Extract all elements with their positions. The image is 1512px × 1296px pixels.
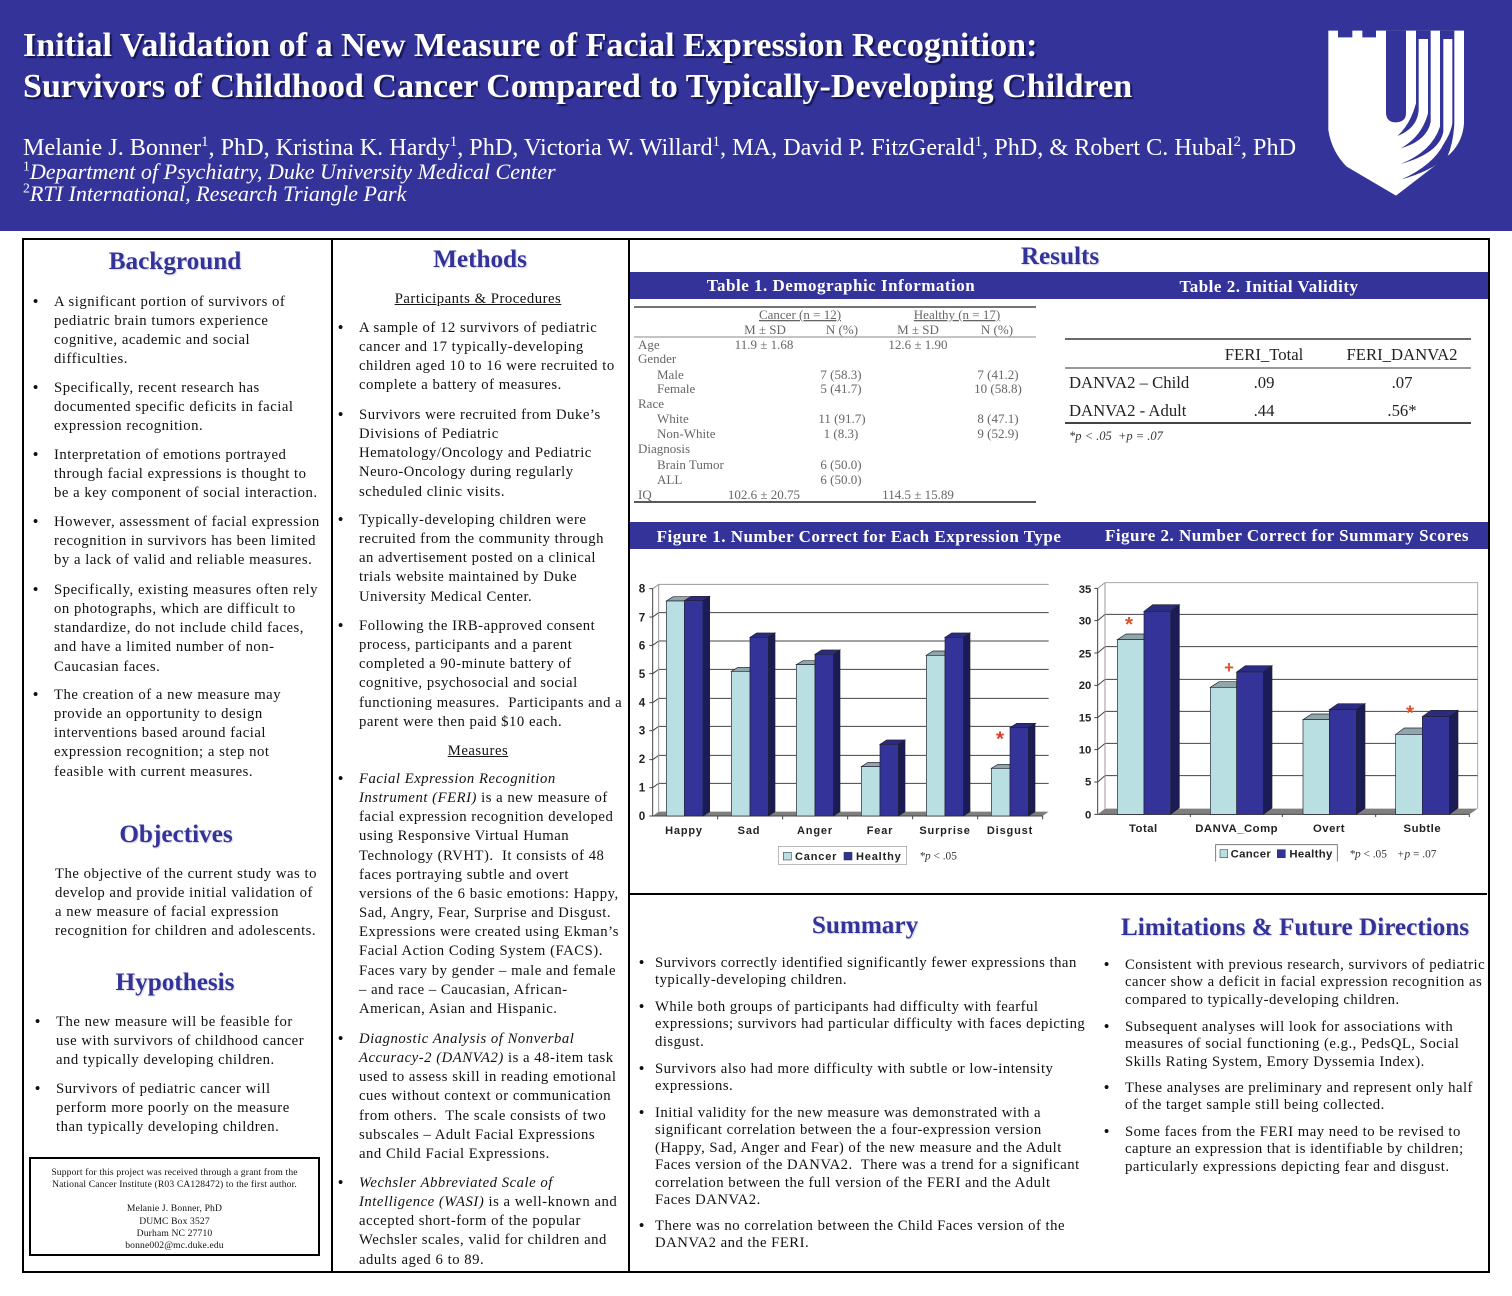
table 2: initial validity: *p < .05 +p = .07 [1069, 429, 1164, 443]
measure: DANVA2: from others. The scale consists of two [359, 1108, 606, 1124]
background bullet 6: The creation of a new measure may [54, 687, 281, 703]
text: • [338, 618, 344, 634]
limitations bullet 1: Consistent with previous research, survivors of pediatric [1125, 957, 1485, 973]
authors: Melanie J. Bonner1, PhD, Kristina K. Hardy1, PhD, Victoria W. Willard1, MA, David P. FitzGerald1, PhD, & Robert C. Hubal2, PhD [23, 134, 1296, 161]
x axis labels: Subtle [1404, 823, 1441, 835]
measure: FERI: Faces vary by gender – male and female [359, 963, 616, 979]
methods bullet 4 [338, 618, 622, 730]
hypothesis bullet 1 [35, 1014, 304, 1068]
table 1: demographics: Male [657, 367, 684, 382]
background bullet 2: documented specific deficits in facial [54, 399, 294, 415]
background bullet 3: Interpretation of emotions portrayed [54, 447, 286, 463]
methods bullet 4: functioning measures. Participants and a [359, 695, 622, 711]
x axis labels: Overt [1313, 823, 1345, 835]
hypothesis bullet 2: Survivors of pediatric cancer will [56, 1081, 271, 1097]
background bullet 4: by a lack of valid and reliable measures. [54, 552, 312, 568]
measure: FERI: facial expression recognition developed [359, 809, 613, 825]
background bullet 5: Specifically, existing measures often rely [54, 582, 318, 598]
measure: WASI: Wechsler Abbreviated Scale of [359, 1175, 553, 1191]
table 1: demographics [634, 306, 1036, 503]
summary bullet 4 [639, 1105, 1080, 1208]
measure: DANVA2: Diagnostic Analysis of Nonverbal [359, 1031, 574, 1047]
poster frame [22, 238, 1490, 1273]
subheading: participants and procedures: Participants & Procedures [395, 291, 561, 307]
limitations bullet 4 [1104, 1124, 1464, 1175]
hypothesis bullet 1: use with survivors of childhood cancer [56, 1033, 304, 1049]
summary bullet 3: expressions. [655, 1078, 733, 1094]
objectives text: The objective of the current study was to [55, 866, 317, 882]
table 2: initial validity: .44 [1254, 401, 1275, 420]
table 1: demographics: 114.5 ± 15.89 [882, 487, 954, 502]
text: • [35, 1081, 41, 1097]
figure header bar [630, 522, 1488, 549]
table 2: initial validity: DANVA2 - Adult [1069, 401, 1187, 420]
background bullet 1 [33, 294, 285, 367]
y axis labels: 7 [639, 611, 645, 624]
hypothesis bullet 1: and typically developing children. [56, 1052, 275, 1068]
table 1: demographics: M ± SD [897, 322, 939, 337]
x axis labels: Happy [665, 825, 703, 837]
table 1: demographics: 8 (47.1) [977, 411, 1019, 426]
bars: disgust [991, 723, 1036, 816]
table 1: demographics: 102.6 ± 20.75 [728, 487, 800, 502]
y axis labels: 5 [1085, 777, 1091, 789]
measure: FERI [338, 771, 619, 1017]
methods bullet 4: parent were then paid $10 each. [359, 714, 562, 730]
background bullet 5: and have a limited number of non- [54, 639, 275, 655]
x axis labels [665, 825, 1033, 837]
x axis labels: Anger [797, 825, 833, 837]
background bullet 6: feasible with current measures. [54, 764, 253, 780]
summary bullet 4: Initial validity for the new measure was demonstrated with a [655, 1105, 1041, 1121]
text: • [1104, 1124, 1110, 1140]
measure: WASI: Wechsler scales, valid for children and [359, 1232, 607, 1248]
background bullet 2 [33, 380, 294, 434]
methods bullet 3: trials website maintained by Duke [359, 569, 577, 585]
bar chart: figure 2 [1079, 582, 1478, 862]
y axis labels: 6 [639, 640, 646, 653]
significance markers [1125, 613, 1415, 724]
background bullet 3 [33, 447, 318, 501]
support and contact box: Durham NC 27710 [137, 1228, 212, 1239]
measure: DANVA2 [338, 1031, 617, 1162]
heading: limitations and future directions: Limitations & Future Directions [1121, 914, 1469, 941]
significance note: *p < .05 [919, 851, 957, 863]
table 1: demographics: 6 (50.0) [820, 457, 862, 472]
methods bullet 4: cognitive, psychosocial and social [359, 675, 578, 691]
summary bullet 5 [639, 1218, 1065, 1251]
summary bullet 2: expressions; survivors had particular difficulty with faces depicting [655, 1016, 1085, 1032]
bars: subtle [1396, 710, 1458, 814]
text: • [33, 294, 39, 310]
summary bullet 4: Faces version of the DANVA2. There was a trend for a significant [655, 1157, 1080, 1173]
table 1: demographics: 7 (41.2) [977, 367, 1019, 382]
legend [1216, 845, 1337, 862]
measure: FERI: Facial Expression Recognition [359, 771, 556, 787]
measure: DANVA2: and Child Facial Expressions. [359, 1146, 550, 1162]
summary bullet 3 [639, 1061, 1053, 1094]
limitations bullet 4: capture an expression that is identifiable by children; [1125, 1141, 1464, 1157]
measure: FERI: Instrument (FERI) is a new measure of [359, 790, 608, 806]
limitations bullet 4: Some faces from the FERI may need to be revised to [1125, 1124, 1461, 1140]
heading: methods: Methods [433, 246, 527, 273]
limitations bullet 2 [1104, 1019, 1459, 1070]
y axis labels: 5 [639, 668, 646, 681]
objectives text: a new measure of facial expression [55, 904, 279, 920]
limitations bullet 1: compared to typically-developing children. [1125, 992, 1400, 1008]
background bullet 6: provide an opportunity to design [54, 706, 263, 722]
summary bullet 1: typically-developing children. [655, 972, 847, 988]
methods bullet 2: Survivors were recruited from Duke’s [359, 407, 601, 423]
title [23, 27, 1134, 106]
methods bullet 4: process, participants and a parent [359, 637, 572, 653]
x axis labels: DANVA_Comp [1195, 823, 1278, 835]
text: • [1104, 1080, 1110, 1096]
y axis labels [639, 583, 646, 823]
bars: DANVA comp [1210, 666, 1272, 814]
table 2: initial validity: .07 [1392, 373, 1412, 392]
table 1: demographics: N (%) [981, 322, 1013, 337]
icon: Duke shield logo [1328, 30, 1464, 196]
summary bullet 2: While both groups of participants had difficulty with fearful [655, 999, 1038, 1015]
summary bullet 5: DANVA2 and the FERI. [655, 1235, 809, 1251]
background bullet 1: A significant portion of survivors of [54, 294, 285, 310]
table 1: demographics: Cancer (n = 12) [759, 307, 841, 322]
methods bullet 2: Divisions of Pediatric [359, 426, 499, 442]
x axis labels: Surprise [919, 825, 971, 837]
subheading: measures: Measures [448, 743, 508, 759]
x axis labels [1129, 823, 1441, 835]
background bullet 3: through facial expressions is thought to [54, 466, 306, 482]
summary bullet 4: correlation between the full version of the FERI and the Adult [655, 1175, 1051, 1191]
background bullet 5: standardize, do not include child faces, [54, 620, 304, 636]
measure: DANVA2: used to assess skill in reading emotional [359, 1069, 617, 1085]
x axis labels: Disgust [987, 825, 1033, 837]
bars: sad [731, 633, 775, 816]
methods bullet 4: Following the IRB-approved consent [359, 618, 595, 634]
legend: Cancer [1231, 849, 1271, 861]
limitations bullet 2: Skills Rating System, Emory Dyssemia Index). [1125, 1054, 1425, 1070]
background bullet 6: interventions based around facial [54, 725, 266, 741]
significance markers: * [1125, 613, 1134, 636]
methods bullet 3: Typically-developing children were [359, 512, 586, 528]
measure: FERI: using Responsive Virtual Human [359, 828, 569, 844]
methods bullet 1 [338, 320, 615, 393]
text: • [33, 447, 39, 463]
table header bar [630, 272, 1488, 299]
y axis labels: 1 [639, 782, 646, 795]
table 2: initial validity: .56* [1387, 401, 1417, 420]
table 2: initial validity: FERI_Total [1225, 345, 1304, 364]
table 2: initial validity: .09 [1254, 373, 1274, 392]
bars: surprise [926, 633, 970, 816]
table 1: demographics: Age [638, 337, 660, 352]
support and contact box [29, 1157, 320, 1256]
measure: WASI: adults aged 6 to 89. [359, 1252, 484, 1268]
methods bullet 3: an advertisement posted on a clinical [359, 550, 596, 566]
significance note: *p < .05 +p = .07 [1349, 848, 1437, 860]
background bullet 2: expression recognition. [54, 418, 203, 434]
summary bullet 3: Survivors also had more difficulty with subtle or low-intensity [655, 1061, 1053, 1077]
title: Survivors of Childhood Cancer Compared to Typically-Developing Children [23, 68, 1132, 105]
measure: FERI: Expressions were created using Ekman’s [359, 924, 619, 940]
table 1: demographics: 1 (8.3) [824, 426, 858, 441]
heading: summary: Summary [812, 912, 918, 939]
y axis labels: 20 [1079, 680, 1091, 692]
text: • [35, 1014, 41, 1030]
y axis labels: 30 [1079, 616, 1091, 628]
methods bullet 2: Hematology/Oncology and Pediatric [359, 445, 592, 461]
table 1: demographics: 7 (58.3) [820, 367, 862, 382]
affiliations: 2RTI International, Research Triangle Park [23, 181, 406, 206]
legend [778, 846, 907, 864]
text: • [33, 514, 39, 530]
measure: FERI: versions of the 6 basic emotions: Happy, [359, 886, 619, 902]
methods bullet 2 [338, 407, 601, 500]
background bullet 5: on photographs, which are difficult to [54, 601, 296, 617]
measure: WASI: Intelligence (WASI) is a well-known and [359, 1194, 617, 1210]
methods bullet 1: cancer and 17 typically-developing [359, 339, 584, 355]
bars: overt [1303, 704, 1365, 814]
support and contact box: National Cancer Institute (R03 CA128472) to the first author. [52, 1179, 297, 1190]
table 1: demographics: 11 (91.7) [818, 411, 866, 426]
support and contact box: Melanie J. Bonner, PhD [127, 1203, 222, 1214]
table 1: demographics: 9 (52.9) [977, 426, 1019, 441]
y axis labels: 10 [1079, 744, 1091, 756]
limitations bullet 3: These analyses are preliminary and represent only half [1125, 1080, 1473, 1096]
summary bullet 4: Faces DANVA2. [655, 1192, 761, 1208]
summary bullet 4: significant correlation between the a four-expression version [655, 1122, 1042, 1138]
limitations bullet 4: particularly expressions depicting fear and disgust. [1125, 1159, 1450, 1175]
table 1: demographics: Race [638, 396, 664, 411]
figure 2 title: Figure 2. Number Correct for Summary Scores [1105, 526, 1469, 545]
affiliations [23, 159, 556, 206]
table 1: demographics: 10 (58.8) [974, 381, 1022, 396]
background bullet 1: difficulties. [54, 351, 128, 367]
title: Initial Validation of a New Measure of Facial Expression Recognition: [23, 27, 1037, 64]
background bullet 4: recognition in survivors has been limited [54, 533, 316, 549]
heading: background: Background [109, 248, 241, 275]
y axis labels: 35 [1079, 584, 1091, 596]
background bullet 1: pediatric brain tumors experience [54, 313, 268, 329]
y axis labels: 3 [639, 725, 646, 738]
summary bullet 2: disgust. [655, 1034, 704, 1050]
summary bullet 2 [639, 999, 1085, 1050]
text: • [639, 1218, 645, 1234]
text: • [338, 407, 344, 423]
significance markers: * [1406, 701, 1415, 724]
y axis labels: 15 [1079, 712, 1091, 724]
text: • [33, 582, 39, 598]
text: • [338, 1031, 344, 1047]
objectives text: recognition for children and adolescents. [55, 923, 316, 939]
bars: anger [796, 650, 840, 816]
measure: FERI: faces portraying subtle and overt [359, 867, 569, 883]
limitations bullet 3 [1104, 1080, 1473, 1113]
heading: results: Results [1021, 243, 1099, 270]
legend: Healthy [1289, 849, 1333, 861]
limitations bullet 1 [1104, 957, 1485, 1008]
methods bullet 1: A sample of 12 survivors of pediatric [359, 320, 597, 336]
table 1: demographics: 12.6 ± 1.90 [888, 337, 948, 352]
table 1: demographics: M ± SD [744, 322, 786, 337]
summary bullet 1: Survivors correctly identified significantly fewer expressions than [655, 955, 1077, 971]
hypothesis bullet 2: perform more poorly on the measure [56, 1100, 290, 1116]
measure: DANVA2: subscales – Adult Facial Expressions [359, 1127, 595, 1143]
summary bullet 1 [639, 955, 1077, 988]
methods bullet 3: University Medical Center. [359, 589, 532, 605]
background bullet 2: Specifically, recent research has [54, 380, 260, 396]
background bullet 6 [33, 687, 281, 780]
hypothesis bullet 2 [35, 1081, 290, 1135]
bar chart: figure 1 [638, 583, 1049, 865]
heading: hypothesis: Hypothesis [116, 969, 234, 996]
background bullet 6: expression recognition; a step not [54, 744, 269, 760]
measure: FERI: Technology (RVHT). It consists of 48 [359, 848, 604, 864]
support and contact box: Support for this project was received through a grant from the [51, 1167, 298, 1178]
support and contact box: DUMC Box 3527 [139, 1216, 210, 1227]
figure 1 title: Figure 1. Number Correct for Each Expression Type [657, 527, 1061, 546]
measure: FERI: – and race – Caucasian, African- [359, 982, 568, 998]
limitations bullet 1: cancer show a deficit in facial expression recognition as [1125, 974, 1482, 990]
table 1: demographics: Non-White [657, 426, 716, 441]
bars: happy [666, 596, 710, 816]
background bullet 5: Caucasian faces. [54, 659, 160, 675]
bars: total [1117, 605, 1179, 814]
measure: DANVA2: Accuracy-2 (DANVA2) is a 48-item task [359, 1050, 614, 1066]
table 1: demographics: IQ [638, 487, 652, 502]
significance markers: + [1224, 658, 1234, 677]
methods bullet 1: children aged 10 to 16 were recruited to [359, 358, 615, 374]
text: • [639, 1061, 645, 1077]
summary bullet 5: There was no correlation between the Child Faces version of the [655, 1218, 1065, 1234]
support and contact box: bonne002@mc.duke.edu [125, 1240, 224, 1251]
text: • [639, 1105, 645, 1121]
legend: Healthy [856, 851, 902, 863]
summary bullet 4: (Happy, Sad, Anger and Fear) of the new measure and the Adult [655, 1140, 1062, 1156]
table 2: initial validity: DANVA2 – Child [1069, 373, 1190, 392]
limitations bullet 2: Subsequent analyses will look for associations with [1125, 1019, 1453, 1035]
measure: WASI [338, 1175, 617, 1268]
methods bullet 3 [338, 512, 604, 605]
legend: Cancer [795, 851, 837, 863]
y axis labels [1079, 584, 1091, 821]
objectives text: develop and provide initial validation of [55, 885, 313, 901]
text: • [1104, 957, 1110, 973]
text: • [33, 687, 39, 703]
measure: FERI: Facial Action Coding System (FACS). [359, 943, 603, 959]
table 1: demographics: N (%) [826, 322, 858, 337]
limitations bullet 2: measures of social functioning (e.g., PedsQL, Social [1125, 1036, 1459, 1052]
background bullet 1: cognitive, academic and social [54, 332, 250, 348]
table 1: demographics: Healthy (n = 17) [914, 307, 1000, 322]
x axis labels: Sad [738, 825, 760, 837]
y axis labels: 4 [639, 696, 646, 709]
text: • [33, 380, 39, 396]
background bullet 5 [33, 582, 318, 675]
hypothesis bullet 1: The new measure will be feasible for [56, 1014, 293, 1030]
text: • [338, 1175, 344, 1191]
methods bullet 2: scheduled clinic visits. [359, 484, 505, 500]
significance star: * [996, 727, 1005, 750]
table 1: demographics: 5 (41.7) [820, 381, 862, 396]
table 1: demographics: Female [657, 381, 695, 396]
limitations bullet 3: of the target sample still being collected. [1125, 1097, 1385, 1113]
objectives text [55, 866, 317, 939]
methods bullet 1: complete a battery of measures. [359, 377, 562, 393]
text: • [639, 955, 645, 971]
affiliations: 1Department of Psychiatry, Duke University Medical Center [23, 159, 556, 184]
table 1: demographics: Gender [638, 351, 677, 366]
table 1: demographics: Diagnosis [638, 441, 690, 456]
text: • [338, 512, 344, 528]
hypothesis bullet 2: than typically developing children. [56, 1119, 279, 1135]
y axis labels: 0 [639, 810, 645, 823]
measure: WASI: accepted short-form of the popular [359, 1213, 581, 1229]
table 2: initial validity [1065, 338, 1471, 443]
text: • [1104, 1019, 1110, 1035]
methods bullet 4: completed a 90-minute battery of [359, 656, 572, 672]
text: • [338, 320, 344, 336]
text: • [639, 999, 645, 1015]
background bullet 4 [33, 514, 320, 568]
background bullet 4: However, assessment of facial expression [54, 514, 320, 530]
table 1 title: Table 1. Demographic Information [707, 276, 975, 295]
text: • [338, 771, 344, 787]
measure: FERI: Sad, Angry, Fear, Surprise and Disgust. [359, 905, 611, 921]
table 2 title: Table 2. Initial Validity [1179, 277, 1359, 296]
header banner [0, 0, 1512, 231]
y axis labels: 8 [639, 583, 646, 596]
table 1: demographics: 6 (50.0) [820, 472, 862, 487]
table 1: demographics: Brain Tumor [657, 457, 724, 472]
measure: FERI: American, Asian and Hispanic. [359, 1001, 558, 1017]
y axis labels: 25 [1079, 648, 1091, 660]
background bullet 3: be a key component of social interaction. [54, 485, 318, 501]
table 1: demographics: 11.9 ± 1.68 [735, 337, 793, 352]
y axis labels: 0 [1085, 809, 1091, 821]
x axis labels: Total [1129, 823, 1158, 835]
heading: objectives: Objectives [119, 821, 233, 848]
x axis labels: Fear [867, 825, 893, 837]
methods bullet 3: recruited from the community through [359, 531, 604, 547]
table 1: demographics: ALL [657, 472, 682, 487]
measure: DANVA2: cues without context or communication [359, 1088, 611, 1104]
methods bullet 2: Neuro-Oncology during regularly [359, 464, 574, 480]
table 2: initial validity: FERI_DANVA2 [1347, 345, 1457, 364]
bars: fear [861, 740, 905, 816]
y axis labels: 2 [639, 753, 646, 766]
table 1: demographics: White [657, 411, 689, 426]
